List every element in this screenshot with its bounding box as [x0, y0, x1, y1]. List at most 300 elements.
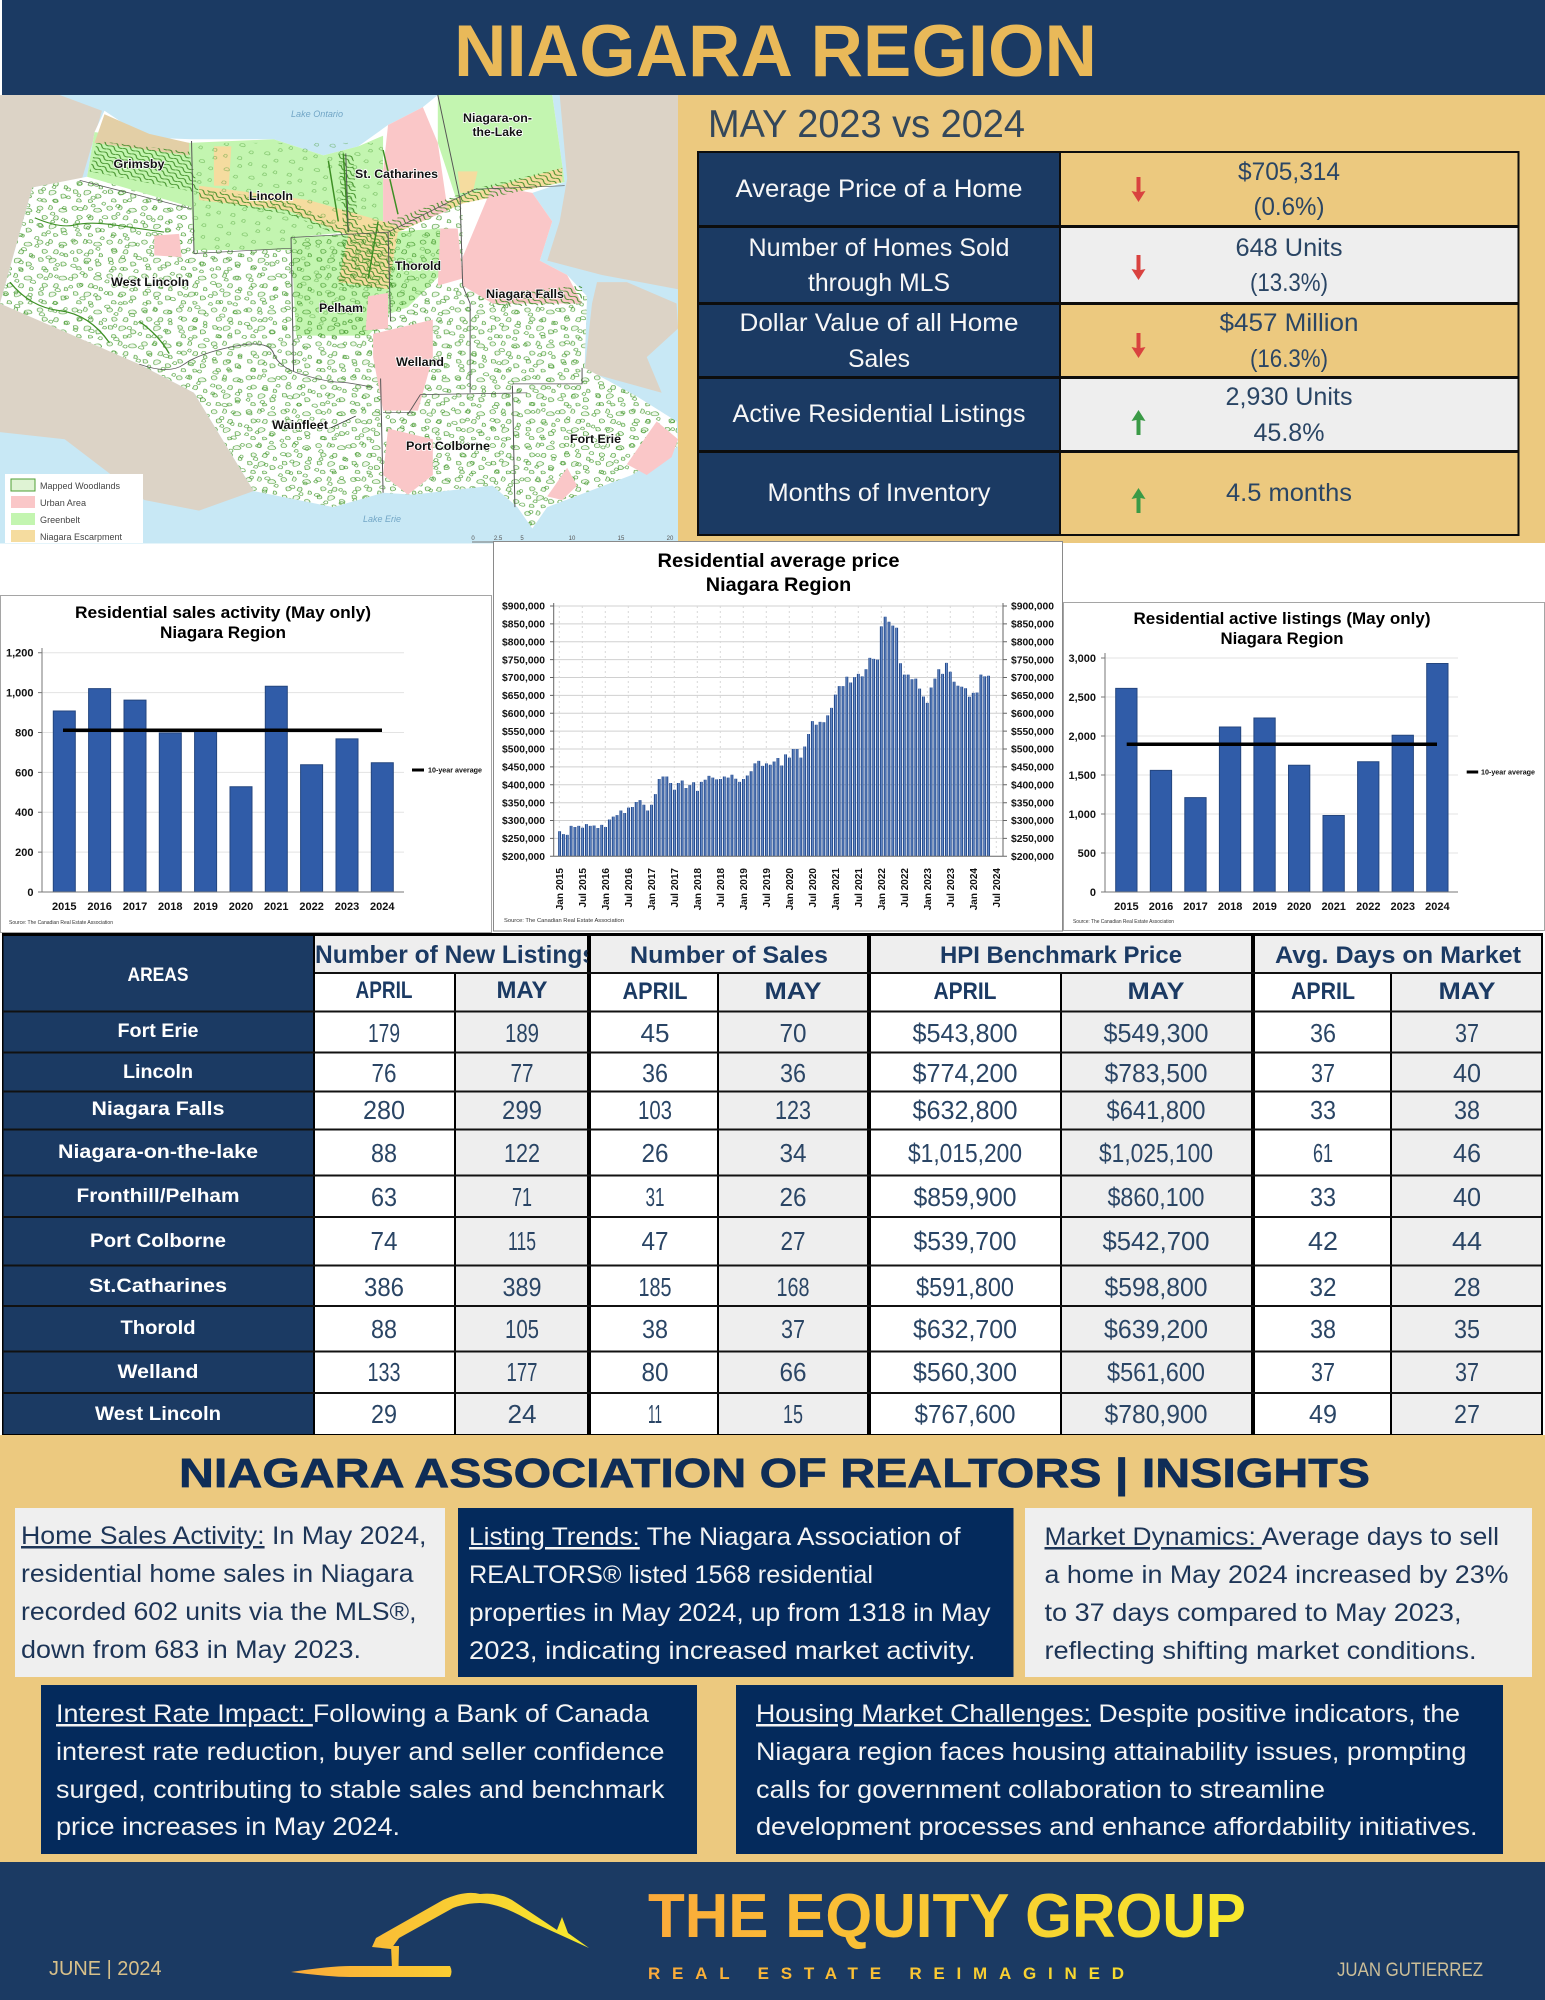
callout: listing trends: REALTORS® listed 1568 residential — [469, 1561, 873, 1589]
map scale bar: 10 — [569, 536, 576, 542]
row: Thorold: 38 — [642, 1314, 668, 1344]
table header: Number of Sales — [630, 942, 828, 969]
row: St.Catharines: $591,800 — [916, 1272, 1014, 1302]
chart: residential sales activity: Residential sales activity (May only) — [75, 603, 371, 622]
chart: residential active listings: 2023 — [1391, 901, 1415, 913]
row: Thorold: 38 — [1310, 1314, 1336, 1344]
row: Niagara Falls: 299 — [502, 1095, 542, 1125]
chart: residential average price: $600,000 — [1011, 709, 1054, 720]
row: Port Colborne — [90, 1226, 1482, 1256]
map scale bar: 15 — [618, 536, 625, 542]
row: Lincoln: 40 — [1453, 1058, 1481, 1088]
row: Lincoln: $783,500 — [1104, 1058, 1208, 1088]
row: homes sold: Number of Homes Sold — [748, 234, 1010, 262]
row: Welland: $561,600 — [1107, 1357, 1205, 1387]
municipality labels: Grimsby — [114, 157, 165, 171]
row: Thorold — [120, 1314, 1480, 1344]
chart: residential active listings: 1,500 — [1068, 770, 1096, 782]
chart: residential active listings: 500 — [1078, 848, 1096, 860]
row: Niagara Falls: 33 — [1310, 1095, 1336, 1125]
row: Fronthill/Pelham: 33 — [1310, 1182, 1336, 1212]
row: Welland: 80 — [642, 1357, 668, 1387]
callout: listing trends: 2023, indicating increased market activity. — [469, 1637, 976, 1665]
chart: residential average price: $600,000 — [502, 709, 545, 720]
chart: residential average price: $650,000 — [502, 691, 545, 702]
chart: residential average price: Jul 2015 — [578, 868, 589, 907]
map scale bar: 5 — [520, 536, 524, 542]
row: active listings: 2,930 Units — [1226, 383, 1352, 411]
row: West Lincoln: 27 — [1454, 1399, 1480, 1429]
callout: listing trends — [458, 1508, 1014, 1677]
row: months of inventory: Months of Inventory — [768, 479, 991, 507]
row: Niagara-on-the-lake: 26 — [642, 1138, 668, 1168]
table header: APRIL — [356, 977, 412, 1004]
row: Fort Erie: 179 — [368, 1018, 400, 1048]
callout: interest rate impact: price increases in May 2024. — [56, 1813, 400, 1841]
chart: residential average price: $800,000 — [1011, 637, 1054, 648]
callout: interest rate impact: surged, contributing to stable sales and benchmark — [56, 1776, 665, 1804]
table header: MAY — [496, 977, 548, 1004]
municipality labels: Thorold — [395, 259, 441, 273]
row: St.Catharines: 389 — [502, 1272, 542, 1302]
chart: residential average price: $250,000 — [1011, 834, 1054, 845]
callout: housing market challenges: Housing Market Challenges: Despite positive indicators, the — [756, 1700, 1460, 1728]
row: West Lincoln: 29 — [371, 1399, 397, 1429]
callout: home sales activity: down from 683 in May 2023. — [21, 1636, 361, 1664]
row: Port Colborne: $542,700 — [1102, 1226, 1210, 1256]
chart: residential active listings: 2021 — [1321, 901, 1346, 913]
row: Lincoln: 36 — [642, 1058, 668, 1088]
chart: residential average price: Niagara Region — [706, 574, 851, 596]
chart: residential average price: Jan 2023 — [923, 868, 934, 910]
row: Port Colborne: 44 — [1452, 1226, 1482, 1256]
map legend: Greenbelt — [40, 515, 80, 526]
row: Fronthill/Pelham: Fronthill/Pelham — [76, 1186, 240, 1207]
chart: residential active listings: 0 — [1090, 887, 1096, 899]
chart: residential average price: Jan 2018 — [693, 868, 704, 910]
table header: AREAS — [128, 965, 188, 986]
chart: residential sales activity: 0 — [27, 887, 34, 899]
row: homes sold: through MLS — [808, 269, 950, 297]
map scale bar — [471, 536, 678, 542]
row: Niagara Falls — [92, 1095, 1480, 1125]
chart: residential average price: Jan 2016 — [601, 868, 612, 910]
row: Fort Erie — [118, 1018, 1479, 1048]
row: dollar value: Sales — [848, 345, 910, 373]
chart: residential average price: $350,000 — [502, 798, 545, 809]
table header: Number of New Listings — [315, 941, 596, 969]
map scale bar: 0 — [471, 536, 475, 542]
map legend — [5, 474, 143, 543]
row: Port Colborne: 115 — [508, 1226, 536, 1256]
row: Fronthill/Pelham: 31 — [646, 1182, 664, 1212]
table header: HPI Benchmark Price — [940, 942, 1182, 969]
chart: residential active listings: 2015 — [1114, 901, 1139, 913]
row: St.Catharines — [89, 1272, 1480, 1302]
chart: residential average price: Jan 2019 — [739, 868, 750, 910]
chart: residential average price: Jan 2022 — [877, 868, 888, 910]
chart: residential sales activity: 1,200 — [6, 648, 34, 660]
chart: residential sales activity: Niagara Region — [160, 623, 286, 642]
row: West Lincoln: 15 — [783, 1399, 803, 1429]
table header: MAY — [1128, 978, 1184, 1005]
chart: residential average price: $300,000 — [1011, 816, 1054, 827]
chart: residential average price: Jul 2022 — [900, 868, 911, 907]
municipality labels: Niagara-on- — [463, 111, 532, 125]
chart: residential average price: $400,000 — [1011, 780, 1054, 792]
callout: market dynamics: reflecting shifting market conditions. — [1044, 1637, 1476, 1665]
row: Welland: 66 — [780, 1357, 806, 1387]
chart: residential average price: $550,000 — [1011, 727, 1054, 738]
callout: interest rate impact — [41, 1685, 697, 1854]
footer band — [0, 1862, 1545, 2000]
row: Niagara-on-the-lake: $1,025,100 — [1099, 1138, 1213, 1168]
callout: home sales activity: residential home sales in Niagara — [21, 1560, 414, 1588]
row: dollar value: $457 Million — [1220, 309, 1358, 337]
chart: residential active listings: 2016 — [1149, 901, 1173, 913]
chart: residential average price: Jan 2020 — [785, 868, 796, 910]
chart: residential sales activity: 2020 — [229, 901, 253, 913]
summary table cells — [697, 151, 1520, 536]
table header: APRIL — [622, 978, 688, 1005]
row: Port Colborne: 74 — [370, 1226, 398, 1256]
chart: residential average price: Jul 2018 — [716, 868, 727, 907]
row: average price — [736, 158, 1340, 221]
icon: house logo — [291, 1893, 589, 1977]
chart: residential average price: $450,000 — [1011, 763, 1054, 774]
row: Niagara-on-the-lake: 61 — [1313, 1138, 1333, 1168]
chart: residential average price: $300,000 — [502, 816, 545, 827]
row: Fronthill/Pelham: 71 — [512, 1182, 532, 1212]
municipality labels: Welland — [396, 355, 444, 369]
row: Lincoln: 36 — [780, 1058, 806, 1088]
chart: residential active listings: 2024 — [1425, 901, 1451, 913]
row: Niagara Falls: 38 — [1454, 1095, 1480, 1125]
chart: residential active listings: Source: The Canadian Real Estate Association — [1073, 919, 1174, 925]
map scale bar: 20 — [667, 536, 674, 542]
lake labels: Lake Erie — [363, 514, 401, 525]
row: Fort Erie: 70 — [780, 1018, 806, 1048]
chart: residential average price: Source: The Canadian Real Estate Association — [504, 918, 624, 924]
municipality labels: Fort Erie — [570, 432, 621, 446]
row: Fort Erie: Fort Erie — [118, 1021, 198, 1042]
row: Lincoln: 77 — [510, 1058, 534, 1088]
map legend: Niagara Escarpment — [40, 532, 122, 543]
row: West Lincoln: 11 — [648, 1399, 662, 1429]
row: St.Catharines: 28 — [1454, 1272, 1480, 1302]
chart: residential active listings: 10-year average — [1481, 770, 1535, 776]
municipality labels — [111, 111, 621, 453]
chart: residential sales activity: 2018 — [158, 901, 183, 913]
chart: residential average price: $750,000 — [502, 655, 545, 666]
row: Niagara-on-the-lake: $1,015,200 — [908, 1138, 1022, 1168]
municipality labels: Niagara Falls — [486, 287, 564, 301]
chart: residential active listings: 2020 — [1287, 901, 1311, 913]
row: Thorold: 105 — [505, 1314, 539, 1344]
row: Welland: 177 — [506, 1357, 538, 1387]
chart: residential sales activity — [0, 596, 492, 932]
chart: residential sales activity: 2015 — [52, 901, 77, 913]
row: Port Colborne: 27 — [780, 1226, 806, 1256]
row: Welland: Welland — [118, 1362, 198, 1383]
chart: residential average price: $550,000 — [502, 727, 545, 738]
row: West Lincoln: 24 — [508, 1399, 536, 1429]
row: dollar value: Dollar Value of all Home — [740, 309, 1018, 337]
chart: residential average price: $700,000 — [1011, 673, 1054, 684]
row: Lincoln — [123, 1058, 1481, 1088]
row: Niagara Falls: $641,800 — [1106, 1095, 1206, 1125]
row: Thorold: $639,200 — [1104, 1314, 1208, 1344]
municipality labels: the-Lake — [472, 125, 523, 139]
callout: housing market challenges: Niagara region faces housing attainability issues, prompting — [756, 1738, 1466, 1766]
chart: residential active listings: Niagara Region — [1220, 629, 1344, 648]
table header: Avg. Days on Market — [1275, 942, 1521, 969]
row: active listings: Active Residential Listings — [732, 400, 1026, 428]
market data table — [2, 933, 1543, 1435]
row: Port Colborne: 47 — [642, 1226, 668, 1256]
row: Thorold: 35 — [1454, 1314, 1480, 1344]
chart: residential average price: $350,000 — [1011, 798, 1054, 809]
chart: residential average price: Jul 2020 — [808, 868, 819, 907]
row: Fronthill/Pelham: 26 — [780, 1182, 806, 1212]
chart: residential active listings: Residential active listings (May only) — [1134, 609, 1430, 628]
callout: market dynamics — [1025, 1508, 1532, 1677]
chart: residential sales activity: 200 — [15, 847, 34, 859]
row: Welland: $560,300 — [913, 1357, 1017, 1387]
row: Lincoln: 37 — [1311, 1058, 1335, 1088]
chart: residential average price: $900,000 — [502, 602, 545, 613]
chart: residential average price: $700,000 — [502, 673, 545, 684]
callout: market dynamics: Market Dynamics: Average days to sell — [1044, 1523, 1499, 1551]
row: Port Colborne: 42 — [1308, 1226, 1338, 1256]
chart: residential average price: $200,000 — [1011, 852, 1054, 863]
chart: residential sales activity: 400 — [15, 807, 34, 819]
row: St.Catharines: 386 — [364, 1272, 404, 1302]
row: Niagara-on-the-lake: 122 — [504, 1138, 540, 1168]
row: Fort Erie: 45 — [640, 1018, 670, 1048]
row: West Lincoln: $767,600 — [914, 1399, 1016, 1429]
row: St.Catharines: 168 — [776, 1272, 810, 1302]
callout: home sales activity: Home Sales Activity: In May 2024, — [21, 1522, 426, 1550]
chart: residential average price: Jul 2023 — [946, 868, 957, 907]
header band — [2, 0, 1545, 95]
chart: residential active listings: 1,000 — [1068, 809, 1096, 821]
municipality labels: Lincoln — [249, 189, 293, 203]
row: Fort Erie: 36 — [1310, 1018, 1336, 1048]
municipality labels: Port Colborne — [406, 439, 490, 453]
lake labels — [291, 109, 401, 525]
chart: residential active listings: 2,000 — [1068, 731, 1096, 743]
chart: residential average price: $400,000 — [502, 780, 545, 792]
title: NIAGARA REGION — [454, 11, 1097, 92]
chart: residential average price: Jan 2021 — [831, 868, 842, 910]
row: St.Catharines: St.Catharines — [89, 1276, 227, 1297]
callout: housing market challenges — [736, 1685, 1503, 1854]
row: average price: Average Price of a Home — [736, 175, 1022, 203]
callout: home sales activity: recorded 602 units via the MLS®, — [21, 1598, 416, 1626]
chart: residential sales activity: 800 — [15, 728, 34, 740]
row: Welland: 37 — [1311, 1357, 1335, 1387]
chart: residential sales activity: 2022 — [299, 901, 324, 913]
map legend: Mapped Woodlands — [40, 481, 120, 492]
row: Fronthill/Pelham: 63 — [371, 1182, 397, 1212]
row: homes sold — [748, 234, 1342, 297]
row: Niagara-on-the-lake: 46 — [1453, 1138, 1481, 1168]
chart: residential average price: Jul 2021 — [854, 868, 865, 907]
row: Fort Erie: 189 — [505, 1018, 539, 1048]
row: West Lincoln: West Lincoln — [95, 1404, 221, 1425]
chart: residential average price: Residential average price — [658, 550, 900, 572]
chart: residential average price: Jul 2016 — [624, 868, 635, 907]
row: Niagara Falls: 280 — [363, 1095, 405, 1125]
callout: housing market challenges: calls for government collaboration to streamline — [756, 1776, 1325, 1804]
row: active listings — [732, 383, 1352, 447]
panel: insights — [0, 1435, 1545, 1862]
row: Fort Erie: 37 — [1455, 1018, 1479, 1048]
row: Thorold: 37 — [781, 1314, 805, 1344]
chart: residential active listings: 2018 — [1218, 901, 1242, 913]
row: dollar value: (16.3%) — [1250, 345, 1328, 373]
row: Niagara Falls: Niagara Falls — [92, 1099, 224, 1120]
chart: residential average price: Jan 2015 — [555, 868, 566, 910]
row: Lincoln: Lincoln — [123, 1062, 193, 1083]
row: St.Catharines: 32 — [1310, 1272, 1336, 1302]
row: dollar value — [740, 309, 1358, 373]
footer date: JUNE | 2024 — [49, 1958, 162, 1980]
row: average price: (0.6%) — [1254, 193, 1324, 221]
row: Fort Erie: $549,300 — [1104, 1018, 1208, 1048]
row: Niagara-on-the-lake: 34 — [780, 1138, 806, 1168]
row: Fronthill/Pelham: $859,900 — [914, 1182, 1016, 1212]
row: Welland: 133 — [368, 1357, 400, 1387]
map of the Niagara Region — [0, 95, 678, 544]
row: Niagara-on-the-lake: 88 — [371, 1138, 397, 1168]
row: homes sold: 648 Units — [1236, 234, 1342, 262]
chart: residential average price: $500,000 — [1011, 745, 1054, 756]
row: Niagara Falls: $632,800 — [912, 1095, 1018, 1125]
chart: residential average price: Jul 2019 — [762, 868, 773, 907]
chart: residential sales activity: 2023 — [335, 901, 359, 913]
chart: residential active listings: 2017 — [1183, 901, 1208, 913]
tagline: REAL ESTATE REIMAGINED — [648, 1964, 1124, 1983]
row: St.Catharines: 185 — [638, 1272, 672, 1302]
chart: residential sales activity: 2017 — [123, 901, 147, 913]
row: Fronthill/Pelham: $860,100 — [1108, 1182, 1204, 1212]
municipality labels: St. Catharines — [355, 167, 438, 181]
chart: residential average price: $800,000 — [502, 637, 545, 648]
row: Fronthill/Pelham — [76, 1182, 1481, 1212]
callout: interest rate impact: interest rate reduction, buyer and seller confidence — [56, 1738, 664, 1766]
row: months of inventory — [768, 479, 1352, 513]
row: Fronthill/Pelham: 40 — [1453, 1182, 1481, 1212]
row: Niagara-on-the-lake — [58, 1138, 1481, 1168]
row: Welland — [118, 1357, 1479, 1387]
chart: residential average price: $850,000 — [502, 620, 545, 631]
chart: residential sales activity: 2016 — [87, 901, 112, 913]
table header: MAY — [764, 978, 822, 1005]
chart: residential average price: Jan 2024 — [969, 868, 980, 910]
row: Lincoln: 76 — [372, 1058, 396, 1088]
footer author: JUAN GUTIERREZ — [1337, 1960, 1483, 1981]
row: homes sold: (13.3%) — [1250, 269, 1328, 297]
chart: residential sales activity: 600 — [15, 767, 34, 779]
table header — [128, 945, 1521, 999]
chart: residential active listings: 2019 — [1252, 901, 1277, 913]
chart: residential average price: $250,000 — [502, 834, 545, 845]
municipality labels: West Lincoln — [111, 275, 189, 289]
chart: residential sales activity: 2021 — [264, 901, 289, 913]
chart: residential active listings: 2022 — [1356, 901, 1381, 913]
row: West Lincoln: $780,900 — [1104, 1399, 1208, 1429]
row: months of inventory: 4.5 months — [1226, 479, 1352, 507]
row: Niagara Falls: 103 — [638, 1095, 672, 1125]
row: Niagara Falls: 123 — [775, 1095, 811, 1125]
row: Port Colborne: $539,700 — [914, 1226, 1016, 1256]
row: Fort Erie: $543,800 — [912, 1018, 1018, 1048]
table header: APRIL — [1291, 978, 1355, 1005]
chart: residential sales activity: Source: The Canadian Real Estate Association — [9, 920, 113, 926]
dense woodland along the escarpment — [90, 141, 582, 307]
chart: residential average price: $450,000 — [502, 763, 545, 774]
chart: residential average price: Jan 2017 — [647, 868, 658, 910]
chart: residential sales activity: 10-year average — [428, 768, 482, 774]
chart: residential average price: $200,000 — [502, 852, 545, 863]
row: active listings: 45.8% — [1254, 419, 1324, 447]
row: Port Colborne: Port Colborne — [90, 1231, 226, 1252]
chart: residential active listings: 2,500 — [1068, 692, 1096, 704]
chart: residential sales activity: 2024 — [370, 901, 395, 913]
chart: residential average price: $650,000 — [1011, 691, 1054, 702]
chart: residential average price: $500,000 — [502, 745, 545, 756]
chart: residential average price: $850,000 — [1011, 620, 1054, 631]
callout: interest rate impact: Interest Rate Impact: Following a Bank of Canada — [56, 1700, 649, 1728]
table header: MAY — [1438, 978, 1496, 1005]
table header: APRIL — [934, 978, 996, 1005]
chart: residential sales activity: 1,000 — [6, 688, 34, 700]
panel: May 2023 vs 2024 summary — [678, 95, 1545, 543]
chart: residential average price — [494, 542, 1062, 931]
row: West Lincoln — [95, 1399, 1480, 1429]
municipality labels: Pelham — [319, 301, 363, 315]
chart: residential average price: Jul 2024 — [992, 868, 1003, 907]
insights heading: NIAGARA ASSOCIATION OF REALTORS | INSIGHTS — [179, 1450, 1370, 1496]
row: Thorold: $632,700 — [913, 1314, 1017, 1344]
callout: market dynamics: a home in May 2024 increased by 23% — [1044, 1561, 1508, 1589]
row: average price: $705,314 — [1238, 158, 1340, 186]
row: West Lincoln: 49 — [1309, 1399, 1337, 1429]
chart: residential average price: Jul 2017 — [670, 868, 681, 907]
callout: listing trends: properties in May 2024, up from 1318 in May — [469, 1599, 991, 1627]
chart: residential active listings: 3,000 — [1068, 653, 1096, 665]
callout: home sales activity — [15, 1508, 445, 1677]
map scale bar: 2.5 — [494, 536, 503, 542]
callout: market dynamics: to 37 days compared to May 2023, — [1044, 1599, 1462, 1627]
row: Lincoln: $774,200 — [912, 1058, 1018, 1088]
row: Welland: 37 — [1455, 1357, 1479, 1387]
map legend: Urban Area — [40, 498, 87, 509]
company name: THE EQUITY GROUP — [648, 1882, 1246, 1951]
chart: residential average price: $750,000 — [1011, 655, 1054, 666]
lake labels: Lake Ontario — [291, 109, 343, 120]
row: Niagara-on-the-lake: Niagara-on-the-lake — [58, 1142, 258, 1163]
callout: listing trends: Listing Trends: The Niagara Association of — [469, 1523, 961, 1551]
chart: residential active listings — [1064, 602, 1544, 930]
chart: residential average price: $900,000 — [1011, 602, 1054, 613]
panel heading: MAY 2023 vs 2024 — [708, 103, 1025, 146]
chart: residential sales activity: 2019 — [193, 901, 218, 913]
callout: housing market challenges: development processes and enhance affordability initiatives. — [756, 1813, 1478, 1841]
row: Thorold: Thorold — [120, 1318, 196, 1339]
